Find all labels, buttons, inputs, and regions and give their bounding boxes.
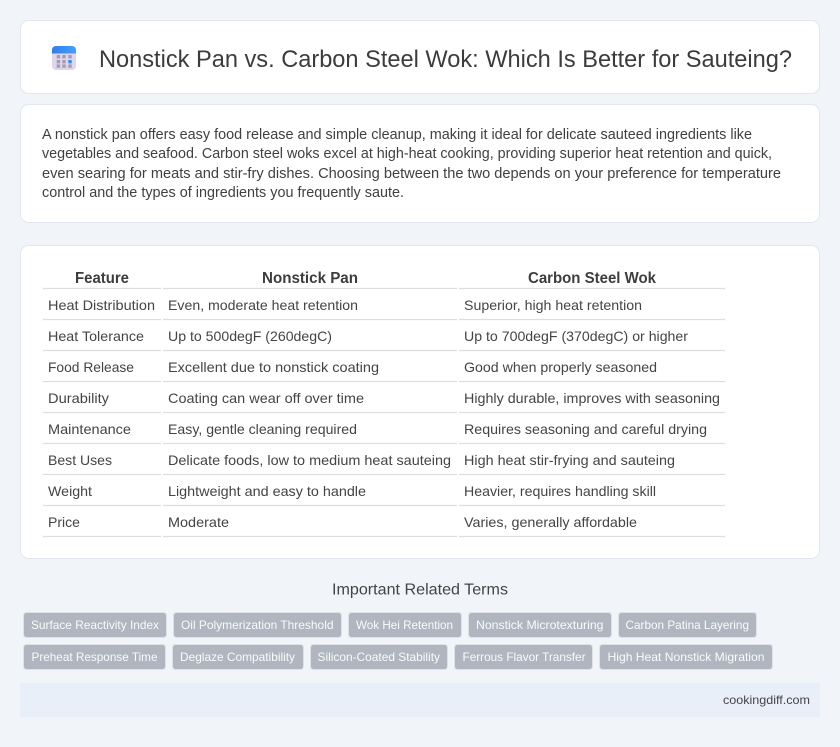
table row: heat tolerance — [48, 328, 688, 344]
table row: price — [48, 514, 637, 530]
text block: description: even searing for meats and stir-fry dishes. Choosing between the two depends on your preference for temperature — [42, 166, 781, 182]
table row: best uses: High heat stir-frying and sauteing — [464, 452, 675, 468]
table row: heat distribution: Even, moderate heat retention — [168, 297, 358, 313]
chip: nonstick microtexturing — [468, 612, 612, 638]
table row: weight: Lightweight and easy to handle — [168, 483, 366, 499]
text block: description: vegetables and seafood. Carbon steel woks excel at high-heat cooking, providing superior heat retention and quick, — [42, 146, 772, 162]
chip: preheat response time: Preheat Response Time — [32, 650, 158, 664]
chip: high heat nonstick migration — [600, 644, 772, 670]
chip: nonstick microtexturing: Nonstick Microtexturing — [476, 618, 604, 632]
table row: maintenance: Maintenance — [48, 421, 131, 437]
footer — [20, 683, 820, 717]
table row: food release: Excellent due to nonstick coating — [168, 359, 379, 375]
table row: heat tolerance: Up to 700degF (370degC) or higher — [464, 328, 688, 344]
chip: wok hei retention — [348, 612, 462, 638]
text block: description: A nonstick pan offers easy food release and simple cleanup, making it ideal for delicate sauteed ingredients like — [42, 127, 752, 143]
panel: description — [20, 104, 820, 222]
table header — [75, 270, 656, 287]
table header: Nonstick Pan — [262, 270, 358, 287]
chip: ferrous flavor transfer: Ferrous Flavor Transfer — [462, 650, 586, 664]
heading: related terms: Important Related Terms — [332, 582, 508, 598]
table row: best uses: Best Uses — [48, 452, 112, 468]
chip: preheat response time — [24, 644, 166, 670]
chip: deglaze compatibility — [172, 644, 304, 670]
chip: deglaze compatibility: Deglaze Compatibility — [180, 650, 295, 664]
table row: durability: Coating can wear off over time — [168, 390, 364, 406]
chip: silicon-coated stability — [310, 644, 448, 670]
table row: price: Varies, generally affordable — [464, 514, 637, 530]
panel: comparison table — [20, 246, 820, 558]
chip: oil polymerization threshold: Oil Polymerization Threshold — [181, 618, 334, 632]
table row: best uses — [48, 452, 675, 468]
chip: carbon patina layering: Carbon Patina Layering — [626, 618, 749, 632]
table row: food release: Food Release — [48, 359, 134, 375]
table row: best uses: Delicate foods, low to medium heat sauteing — [168, 452, 451, 468]
table row: heat distribution: Heat Distribution — [48, 297, 155, 313]
table row: food release — [48, 359, 657, 375]
chip: ferrous flavor transfer — [454, 644, 592, 670]
table row: food release: Good when properly seasoned — [464, 359, 657, 375]
chip: high heat nonstick migration: High Heat Nonstick Migration — [608, 650, 764, 664]
chip: surface reactivity index — [24, 612, 166, 638]
chip: wok hei retention: Wok Hei Retention — [356, 618, 453, 632]
table row: maintenance — [48, 421, 707, 437]
table row: price: Moderate — [168, 514, 229, 530]
table row: weight — [48, 483, 656, 499]
table row: weight: Weight — [48, 483, 92, 499]
chip: oil polymerization threshold — [174, 612, 342, 638]
table header: Feature — [75, 270, 129, 287]
table row: durability: Durability — [48, 390, 109, 406]
title: Nonstick Pan vs. Carbon Steel Wok: Which Is Better for Sauteing? — [99, 46, 792, 73]
table header: Carbon Steel Wok — [528, 270, 656, 287]
table row: price: Price — [48, 514, 80, 530]
footer source: cookingdiff.com — [723, 693, 810, 707]
text block: description: control and the types of ingredients you frequently saute. — [42, 185, 404, 201]
panel: title header — [20, 20, 820, 94]
table row: durability: Highly durable, improves with seasoning — [464, 390, 720, 406]
table row: weight: Heavier, requires handling skill — [464, 483, 656, 499]
table row: durability — [48, 390, 720, 406]
icon: calendar — [52, 46, 76, 70]
table row: heat tolerance: Up to 500degF (260degC) — [168, 328, 332, 344]
table row: maintenance: Easy, gentle cleaning required — [168, 421, 357, 437]
chip: surface reactivity index: Surface Reactivity Index — [31, 618, 159, 632]
table row: maintenance: Requires seasoning and careful drying — [464, 421, 707, 437]
related term chips — [24, 612, 772, 670]
chip: silicon-coated stability: Silicon-Coated Stability — [318, 650, 440, 664]
table row: heat tolerance: Heat Tolerance — [48, 328, 144, 344]
text block: description — [42, 127, 781, 201]
table row: heat distribution — [48, 297, 642, 313]
table row: heat distribution: Superior, high heat retention — [464, 297, 642, 313]
chip: carbon patina layering — [618, 612, 756, 638]
